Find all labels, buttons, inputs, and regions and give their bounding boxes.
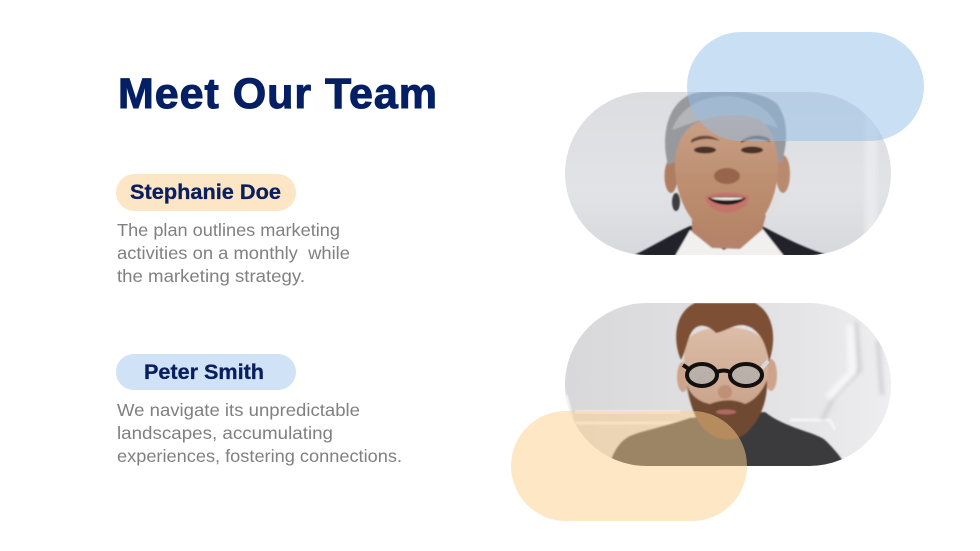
ears [664, 159, 678, 193]
glasses [683, 364, 762, 386]
earrings [672, 193, 680, 211]
neck [692, 215, 766, 249]
glasses arm [762, 361, 768, 368]
sweater [609, 412, 846, 467]
brows [691, 136, 720, 143]
description: Peter Smith: We navigate its unpredictable [117, 400, 360, 420]
decorative pill: orange [511, 411, 747, 521]
ears [677, 362, 689, 392]
hair [665, 91, 786, 165]
shirt [675, 228, 784, 256]
description: Stephanie Doe [117, 220, 350, 286]
jacket [632, 226, 832, 256]
description: Peter Smith: landscapes, accumulating [117, 423, 333, 443]
name badge: Stephanie Doe: Stephanie Doe [130, 181, 281, 204]
name badge: Stephanie Doe [116, 174, 296, 211]
eyes [694, 146, 716, 154]
description: Stephanie Doe: The plan outlines marketing [117, 220, 340, 240]
lips [716, 410, 736, 414]
title: Meet Our Team [118, 70, 437, 118]
name badge: Peter Smith [116, 354, 296, 390]
name badge: Peter Smith: Peter Smith [144, 361, 264, 384]
photo: Peter Smith portrait [565, 303, 891, 467]
photo: Stephanie Doe portrait [565, 91, 891, 256]
nose [718, 385, 732, 399]
nose [714, 168, 740, 184]
mouth [705, 192, 749, 213]
beard [687, 380, 767, 439]
decorative pill: blue [687, 32, 924, 141]
panel: Stephanie Doe profile text [116, 174, 350, 286]
description: Peter Smith: experiences, fostering connections. [117, 446, 402, 466]
description: Stephanie Doe: activities on a monthly while [117, 243, 350, 263]
panel: Peter Smith profile text [116, 354, 402, 466]
face [674, 114, 778, 220]
face [683, 327, 768, 408]
description: Peter Smith [117, 400, 402, 466]
hair [676, 303, 773, 362]
description: Stephanie Doe: the marketing strategy. [117, 266, 305, 286]
